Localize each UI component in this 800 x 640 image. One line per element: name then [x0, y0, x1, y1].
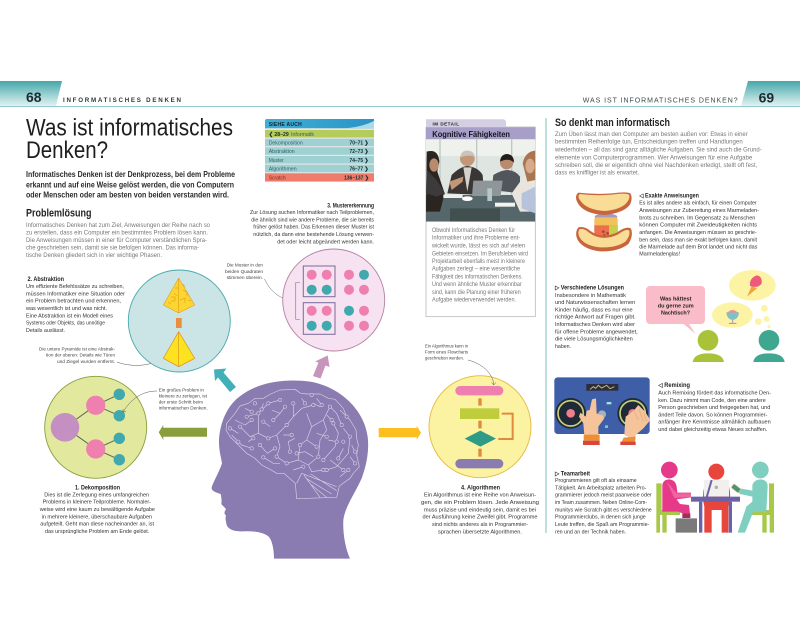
text: Kognitive Fähigkeiten: Fähigkeit des informatischen Denkens.: [432, 274, 523, 280]
text: Exakte Anweisungen: ben sein, dass man sie exakt befolgen kann, damit: [639, 237, 757, 243]
annotation: Flowchart: [425, 343, 496, 385]
laptop: [704, 480, 729, 497]
text block: So denkt man informatisch: elemente von Computerprogrammen. Wer Anweisungen für eine Aufgabe: [555, 155, 753, 161]
text: 4. Algorithmen: sind nichts anderes als in Programmier-: [432, 522, 528, 528]
annotation: großes Problem: kleinere zu zerlegen, ist: [159, 393, 208, 399]
heading: So denkt man informatisch: So denkt man informatisch: [555, 117, 670, 129]
text: Exakte Anweisungen: brots zu schreiben. Im Gegensatz zu Menschen: [639, 215, 755, 221]
text: 1. Dekomposition: 1. Dekomposition: [75, 485, 120, 491]
text: Teamarbeit: Programmierclubs, in denen sich junge: [555, 515, 646, 521]
woman right: [512, 152, 535, 212]
arrow: to Mustererkennung: [313, 356, 330, 378]
panel: Im Detail: IM DETAIL: [432, 121, 459, 126]
text: 4. Algorithmen: muss präzise und eindeutig sein, damit es bei: [424, 507, 536, 513]
text: Exakte Anweisungen: ◁ Exakte Anweisungen: [638, 193, 699, 200]
text: 4. Algorithmen: 4. Algorithmen: [461, 485, 500, 491]
man right: [492, 170, 520, 193]
bottom bread: [576, 227, 632, 251]
top bread: [576, 192, 632, 215]
text: Remixing: ◁ Remixing: [657, 382, 690, 389]
text: 1. Dekomposition: das ursprüngliche Problem am Ende gelöst.: [45, 529, 150, 535]
text: Remixing: [657, 382, 771, 433]
chair left: [656, 483, 680, 533]
text: 4. Algorithmen: sprachen übersetzte Algorithmen.: [438, 529, 522, 535]
text: Exakte Anweisungen: Es ist alles andere als einfach, für einen Computer: [639, 201, 757, 207]
text: Remixing: Person geschrieben und freigegeben hat, und: [658, 405, 770, 411]
see also box: 72–73 ❯: [350, 149, 368, 155]
title: Was ist informatisches: [26, 114, 233, 142]
text: 1. Dekomposition: Problems in kleinere Teilprobleme. Normaler-: [43, 500, 151, 506]
head silhouette: [212, 380, 368, 559]
annotation: Pyramide: und Ziegel wurden entfernt.: [57, 359, 115, 365]
column divider: [545, 118, 547, 533]
see also box: Muster: [269, 158, 284, 164]
text: Kognitive Fähigkeiten: Aufgabe wiederverwendet werden.: [432, 297, 516, 303]
text block: Problemlösung: Die Anweisungen müssen in einer für Computer verständlichen Spra-: [26, 238, 207, 244]
text: Kognitive Fähigkeiten: Gebieten einsetzen. Im Berufsleben wird: [432, 251, 528, 257]
annotation: Flowchart: geschrieben werden.: [425, 356, 464, 362]
text: 2. Abstraktion: ein Problem betrachten und erkennen,: [26, 299, 121, 305]
text: 1. Dekomposition: aufgeteilt. Geht man diese nacheinander an, ist: [40, 522, 154, 528]
photo: meeting: [426, 139, 535, 222]
illustration: dessert question: [646, 270, 785, 362]
panel: Im Detail: [426, 119, 535, 317]
text block: So denkt man informatisch: dass es kniffliger ist als erwartet.: [555, 171, 640, 177]
see also box: Informatik: [291, 132, 314, 138]
left page header: INFORMATISCHES DENKEN: [63, 97, 182, 104]
speech bubble: [646, 286, 705, 334]
text: Verschiedene Lösungen: für offene Probleme angewendet,: [555, 329, 638, 335]
person pink: [661, 462, 678, 478]
woman left: [426, 151, 445, 212]
illustration: team at table: [656, 462, 774, 533]
text: 2. Abstraktion: was wesentlich ist und was nicht.: [25, 306, 107, 312]
see also box: 70–71 ❯: [350, 140, 368, 146]
text: Verschiedene Lösungen: die viele Lösungsmöglichkeiten: [555, 337, 633, 343]
text block: Problemlösung: [26, 223, 211, 259]
jar: [595, 214, 617, 220]
see also box: SIEHE AUCH: [269, 122, 302, 128]
text: 1. Dekomposition: Dies ist die Zerlegung eines umfangreichen: [44, 492, 149, 498]
text: 1. Dekomposition: weise wird eine kaum zu bewältigende Aufgabe: [39, 507, 156, 513]
annotation: Muster: beiden Quadraten: [225, 269, 263, 275]
text block: So denkt man informatisch: wiederholen – all das sind ganz alltägliche Aufgaben. Sie sind auch die Grund-: [554, 147, 762, 153]
text: 1. Dekomposition: in mehrere kleinere, überschaubare Aufgaben: [42, 514, 152, 520]
text: 4. Algorithmen: gen, die ein Problem lösen. Jede Anweisung: [421, 500, 539, 506]
text: Exakte Anweisungen: Anweisungen zur Zubereitung eines Marmeladen-: [639, 208, 759, 214]
text: Kognitive Fähigkeiten: [431, 228, 528, 303]
text: Teamarbeit: grammierer jedoch meist paarweise oder: [555, 493, 652, 499]
text: Teamarbeit: munitys wie Scratch gibt es verschiedene: [555, 507, 652, 513]
text: 3. Mustererkennung: [250, 203, 374, 245]
icon: transition bar: [176, 318, 182, 328]
text: Kognitive Fähigkeiten: Und wenn ähnliche Muster erkennbar: [432, 282, 522, 288]
right page header: WAS IST INFORMATISCHES DENKEN?: [583, 97, 738, 104]
annotation: Pyramide: tion der oberen: Details wie Türen: [46, 353, 115, 359]
text: Verschiedene Lösungen: haben.: [555, 344, 571, 350]
text block: Problemlösung: tische Denken gliedert sich in vier wichtige Phasen.: [26, 253, 162, 259]
text: Teamarbeit: Tätigkeit. Am Arbeitsplatz arbeiten Pro-: [555, 485, 646, 491]
illustration: dessert question: du gerne zum: [658, 303, 694, 309]
text block: Problemlösung: che geschrieben sein, damit sie sie befolgen können. Das informa-: [26, 245, 199, 251]
intro text: oder Menschen oder am besten von beiden verstanden wird.: [26, 190, 229, 199]
text: Remixing: Auch Remixing fördert das informatische Den-: [658, 390, 771, 396]
text: 3. Mustererkennung: 3. Mustererkennung: [327, 203, 374, 209]
text: Remixing: ken. Dazu nimmt man Code, den eine andere: [658, 398, 766, 404]
text: Remixing: anfänger ihre Kenntnisse allmählich aufbauen: [658, 420, 771, 426]
text: Verschiedene Lösungen: Kinder häufig, dass es nur eine: [555, 307, 633, 313]
circle: Mustererkennung: [283, 249, 385, 351]
text block: So denkt man informatisch: bestimmten Reihenfolge tun, Entscheidungen treffen und Handlungen: [555, 140, 743, 146]
text: 2. Abstraktion: Um effiziente Befehlssätze zu schreiben,: [26, 284, 124, 290]
see also box: 136–137 ❯: [344, 176, 369, 182]
text: Verschiedene Lösungen: Insbesondere in Mathematik: [555, 293, 626, 299]
intro text: erkannt und auf eine Weise gelöst werden, die von Computern: [26, 180, 234, 189]
annotation: großes Problem: der erste Schritt beim: [159, 399, 203, 405]
text block: Problemlösung: zu erstellen, dass ein Computer ein bestimmtes Problem lösen kann.: [26, 230, 208, 236]
annotation: großes Problem: Ein großes Problem in: [159, 387, 204, 393]
text: Kognitive Fähigkeiten: Informatiker und ihre Probleme ent-: [432, 236, 520, 242]
text: 2. Abstraktion: [25, 277, 125, 334]
annotation: Flowchart: Ein Algorithmus kann in: [425, 343, 468, 349]
see also box: [265, 119, 374, 182]
heading: Problemlösung: Problemlösung: [26, 208, 92, 220]
text: 2. Abstraktion: Systems oder Objekts, das unnötige: [26, 321, 106, 327]
icon: ice cream: [747, 286, 757, 297]
text: Kognitive Fähigkeiten: Aufgaben zerlegt – eine wesentliche: [432, 267, 521, 273]
text: Exakte Anweisungen: Marmeladenglas!: [639, 252, 680, 258]
text: Teamarbeit: Leute treffen, die Spaß am Programmie-: [555, 522, 649, 528]
bag: [676, 518, 697, 533]
text: Teamarbeit: ▷ Teamarbeit: [554, 470, 590, 477]
text: Teamarbeit: Programmieren gilt oft als einsame: [555, 478, 637, 484]
text: 1. Dekomposition: [39, 485, 156, 535]
title: [26, 114, 233, 164]
see also box: Abstraktion: [269, 149, 295, 155]
illustration: dessert question: Was hättest: [660, 296, 692, 302]
annotation: Muster: Die Muster in den: [227, 263, 263, 269]
annotation: Muster: [225, 263, 295, 301]
table items: [443, 195, 463, 198]
right page header: 69: [759, 90, 774, 105]
hand right: [624, 405, 650, 440]
intro text: Informatisches Denken ist der Denkprozess, bei dem Probleme: [26, 170, 235, 179]
text: 4. Algorithmen: der Ausführung keine Zweifel gibt. Programme: [422, 515, 538, 521]
circle: Abstraktion: [128, 270, 230, 372]
text: 3. Mustererkennung: früher gelöst haben. Das Erkennen dieser Muster ist: [253, 225, 374, 231]
see also box: Algorithmen: [269, 166, 297, 172]
text: Teamarbeit: [554, 470, 652, 535]
text: 3. Mustererkennung: nützlich, da dann eine bestehende Lösung verwen-: [253, 232, 374, 238]
text: 4. Algorithmen: [421, 485, 539, 535]
text: 2. Abstraktion: 2. Abstraktion: [28, 277, 64, 283]
person red: [708, 464, 724, 480]
text: Kognitive Fähigkeiten: wickelt wurde, lässt es sich auf vielen: [431, 244, 525, 250]
icon: sundae: [726, 311, 739, 320]
text block: So denkt man informatisch: Zum Üben lässt man den Computer am besten außen vor: Etwas in einer: [555, 131, 748, 138]
text: Verschiedene Lösungen: und Naturwissenschaften lernen: [555, 300, 635, 306]
text: Teamarbeit: im Team zusammen. Neben Online-Com-: [555, 500, 647, 506]
text block: So denkt man informatisch: [554, 131, 762, 177]
text: Exakte Anweisungen: anfangen. Die Anweisungen müssen so geschrie-: [639, 230, 757, 236]
icon: simple pyramid: [163, 332, 195, 367]
panel: Im Detail: Kognitive Fähigkeiten: [432, 129, 510, 139]
left page header: [0, 81, 800, 106]
circle: Dekomposition: [45, 376, 147, 478]
text: Remixing: und dabei gleichzeitig etwas Neues schaffen.: [658, 427, 768, 433]
icon: detailed pyramid: [163, 278, 195, 313]
laptop: [472, 181, 503, 196]
annotation: Flowchart: Form eines Flowcharts: [425, 350, 469, 356]
icon: sandwich: [576, 192, 632, 251]
person right: [759, 330, 779, 351]
person teal: [752, 462, 769, 478]
hand left: [579, 398, 604, 435]
man centre: [447, 166, 484, 195]
illustration: dessert question: Nachtisch?: [661, 310, 690, 316]
text: 2. Abstraktion: Eine Abstraktion ist ein Modell eines: [26, 313, 113, 319]
arrow: to Dekomposition: [159, 425, 207, 440]
text block: So denkt man informatisch: schreiben soll, die er eigentlich ohne viel Nachdenken erledigt, stellt oft fest,: [555, 163, 758, 169]
text: Exakte Anweisungen: können Computer mit Zweideutigkeiten nichts: [639, 223, 757, 229]
text: 3. Mustererkennung: det oder leicht abgeändert werden kann.: [277, 239, 374, 245]
see also box: 74–75 ❯: [350, 158, 368, 164]
annotation: großes Problem: informatischen Denken.: [159, 406, 208, 412]
annotation: Muster: stimmen überein.: [227, 275, 263, 281]
arrow: to Algorithmen: [379, 426, 421, 440]
arrow: to Abstraktion: [214, 368, 236, 392]
intro text: [26, 170, 235, 199]
text: Verschiedene Lösungen: [554, 285, 638, 350]
person left: [698, 330, 718, 351]
annotation: großes Problem: [123, 387, 208, 412]
table: [691, 497, 740, 502]
text: Teamarbeit: ren und an der Technik haben.: [555, 529, 626, 535]
circle: Algorithmen: [429, 376, 531, 478]
right page header: [583, 81, 800, 106]
head with brain: [212, 380, 368, 559]
text: 3. Mustererkennung: die ähnlich sind wie andere Probleme, die sie bereits: [251, 217, 374, 223]
text: Verschiedene Lösungen: ▷ Verschiedene Lösungen: [554, 285, 624, 292]
left page header: 68: [26, 90, 42, 105]
chair right: [750, 483, 774, 533]
text: Kognitive Fähigkeiten: sind, kann die Planung einer früheren: [432, 290, 521, 296]
text: 4. Algorithmen: Ein Algorithmus ist eine Reihe von Anweisun-: [424, 493, 536, 499]
see also box: 76–77 ❯: [350, 166, 368, 172]
annotation: Pyramide: [39, 347, 163, 365]
thought bubbles: [712, 270, 776, 328]
text: Exakte Anweisungen: die Marmelade auf dem Brot landet und nicht das: [639, 244, 757, 250]
see also box: ❮ 28–29: [269, 132, 289, 138]
text: Verschiedene Lösungen: Informatisches Denken wird aber: [555, 322, 635, 328]
brain circuit lines: [226, 389, 359, 499]
text: 2. Abstraktion: Details auslässt.: [26, 328, 65, 334]
text: Kognitive Fähigkeiten: Projektarbeit ebenfalls meist in kleinere: [432, 259, 526, 265]
text: 3. Mustererkennung: Zur Lösung suchen Informatiker nach Teilproblemen,: [250, 210, 374, 216]
illustration: turntables: [554, 377, 650, 445]
annotation: Pyramide: Die untere Pyramide ist eine Abstrak-: [39, 347, 115, 353]
text: Exakte Anweisungen: [638, 193, 759, 258]
see also box: Scratch: [269, 176, 286, 182]
title: Denken?: [26, 137, 108, 164]
text: Remixing: ändert Teile davon. So können Programmier-: [658, 412, 767, 418]
text block: Problemlösung: Informatisches Denken hat zum Ziel, Anweisungen der Reihe nach so: [26, 223, 211, 229]
text: Verschiedene Lösungen: richtige Antwort auf Fragen gibt.: [555, 315, 636, 321]
text: 2. Abstraktion: müssen Informatiker eine Situation oder: [26, 291, 125, 297]
text: Kognitive Fähigkeiten: Obwohl Informatisches Denken für: [432, 228, 515, 234]
see also box: Dekomposition: [269, 140, 303, 146]
